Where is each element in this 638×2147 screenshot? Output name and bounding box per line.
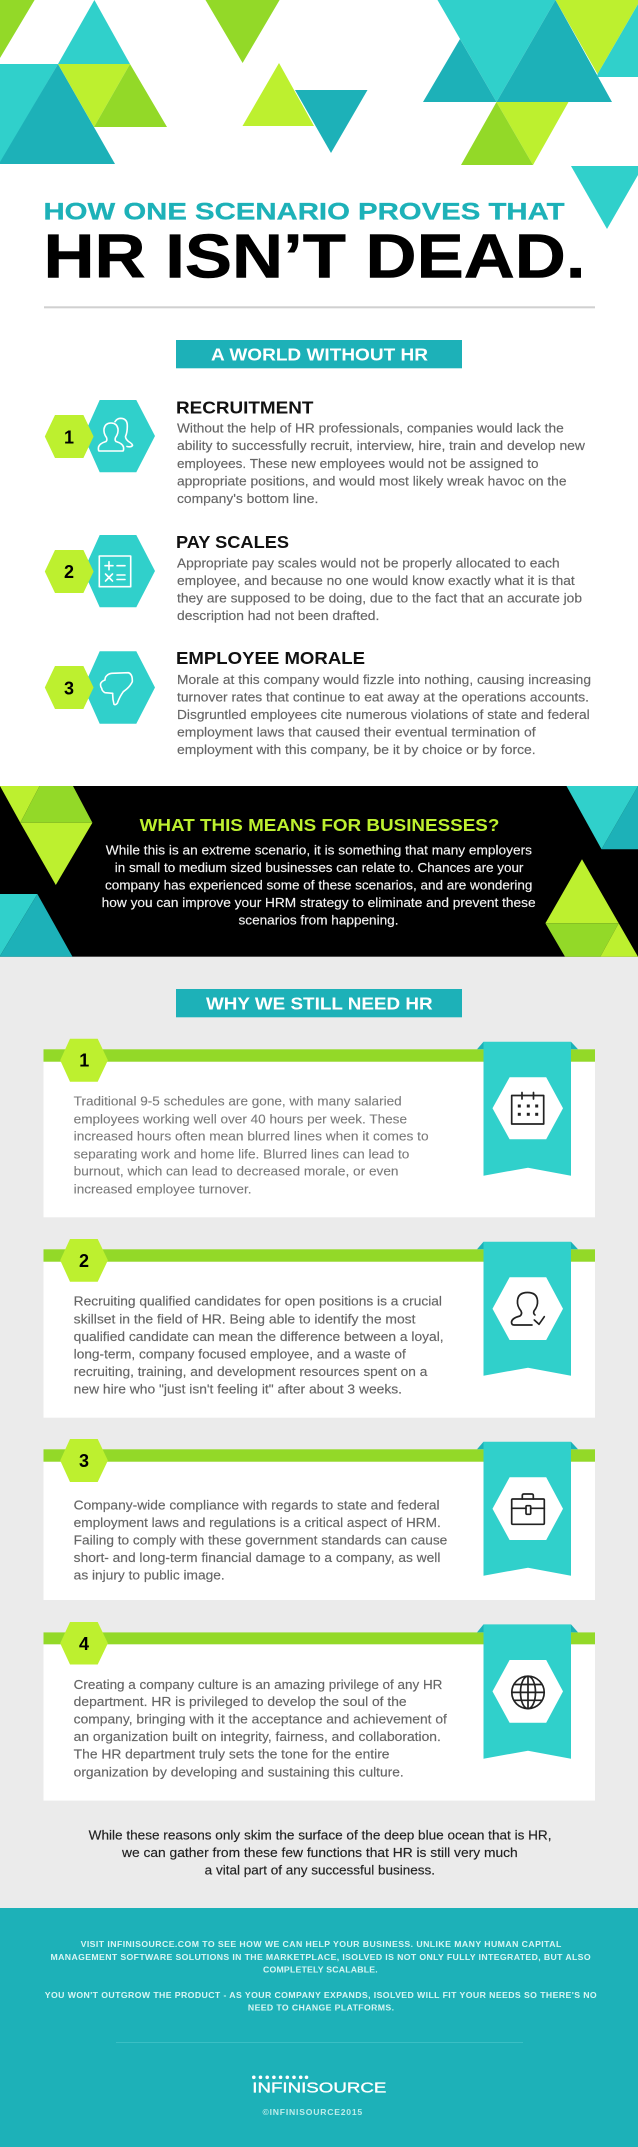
body text: department. HR is privileged to develop the soul of the xyxy=(74,1695,407,1709)
body text: Morale at this company would fizzle into nothing, causing increasing xyxy=(177,673,591,687)
body text xyxy=(74,1678,447,1779)
card 3 xyxy=(44,1439,595,1600)
heading: PAY SCALES xyxy=(176,532,289,552)
icon: calculator in hexagon: 2 xyxy=(64,562,74,582)
body text: Failing to comply with these government standards can cause xyxy=(74,1533,447,1547)
decorative triangles: band bottom left xyxy=(0,894,72,957)
body text: as injury to public image. xyxy=(74,1568,225,1582)
heading: WHAT THIS MEANS FOR BUSINESSES? xyxy=(140,815,499,835)
logo: infinisource: INFINISOURCE xyxy=(252,2081,386,2097)
icon: thumbs down in hexagon xyxy=(45,651,155,724)
body text: skillset in the field of HR. Being able to identify the most xyxy=(74,1312,416,1326)
body text: employment with this company, be it by choice or by force. xyxy=(177,743,536,757)
body text: While this is an extreme scenario, it is something that many employers xyxy=(106,843,532,857)
number hexagon xyxy=(60,1622,108,1664)
icon: people in hexagon xyxy=(45,400,155,472)
number hexagon: 4 xyxy=(79,1634,89,1654)
body text: how you can improve your HRM strategy to eliminate and prevent these xyxy=(102,896,536,910)
body text: employees working well over 40 hours per week. These xyxy=(74,1112,407,1126)
body text: separating work and home life. Blurred lines can lead to xyxy=(74,1147,409,1161)
closing statement: a vital part of any successful business. xyxy=(205,1863,435,1877)
body text: scenarios from happening. xyxy=(238,914,398,928)
body text: increased hours often mean blurred lines when it comes to xyxy=(74,1130,429,1144)
copyright: ©INFINISOURCE2015 xyxy=(262,2107,362,2117)
body text xyxy=(74,1295,444,1397)
footer text: COMPLETELY SCALABLE. xyxy=(263,1965,378,1975)
body text: Traditional 9-5 schedules are gone, with many salaried xyxy=(74,1095,402,1109)
icon: calculator in hexagon xyxy=(45,535,155,607)
footer text: YOU WON'T OUTGROW THE PRODUCT - AS YOUR COMPANY EXPANDS, ISOLVED WILL FIT YOUR NEEDS SO THERE'S NO xyxy=(45,1990,597,2000)
number hexagon: 1 xyxy=(79,1051,89,1071)
body text: turnover rates that continue to eat away at the operations accounts. xyxy=(177,690,589,704)
body text: qualified candidate can mean the difference between a loyal, xyxy=(74,1330,444,1344)
body text: organization by developing and sustaining this culture. xyxy=(74,1765,404,1779)
body text: Recruiting qualified candidates for open positions is a crucial xyxy=(74,1295,442,1309)
ribbon with calendar icon xyxy=(477,1042,578,1176)
body text: employee, and because no one would know exactly what it is that xyxy=(177,574,575,588)
body text: Creating a company culture is an amazing privilege of any HR xyxy=(74,1678,442,1692)
body text: an organization built on integrity, fairness, and collaboration. xyxy=(74,1730,441,1744)
body text: appropriate positions, and would most likely wreak havoc on the xyxy=(177,474,566,488)
heading: EMPLOYEE MORALE xyxy=(176,648,365,668)
body text: employment laws that caused their eventual termination of xyxy=(177,726,536,740)
footer text: MANAGEMENT SOFTWARE SOLUTIONS IN THE MARKETPLACE, ISOLVED IS NOT ONLY FULLY INTEGRATED, BUT ALSO xyxy=(50,1952,591,1962)
body text xyxy=(177,673,591,757)
closing statement: While these reasons only skim the surface of the deep blue ocean that is HR, xyxy=(89,1828,551,1842)
body text: burnout, which can lead to decreased morale, or even xyxy=(74,1165,398,1179)
number hexagon xyxy=(60,1239,108,1282)
body text xyxy=(74,1095,429,1196)
body text: The HR department truly sets the tone for the entire xyxy=(74,1748,389,1762)
body text: Company-wide compliance with regards to state and federal xyxy=(74,1498,440,1512)
title: HOW ONE SCENARIO PROVES THAT xyxy=(44,198,565,226)
ribbon with person check icon xyxy=(477,1242,578,1376)
footer text: NEED TO CHANGE PLATFORMS. xyxy=(248,2003,394,2013)
number hexagon: 3 xyxy=(79,1451,89,1471)
ribbon with briefcase icon xyxy=(477,1442,578,1576)
decorative triangles: top centre cluster xyxy=(206,0,368,153)
body text: long-term, company focused employee, and a waste of xyxy=(74,1347,406,1361)
number hexagon: 2 xyxy=(79,1251,89,1271)
body text: Disgruntled employees cite numerous violations of state and federal xyxy=(177,708,590,722)
decorative triangles: top left cluster xyxy=(0,0,167,164)
decorative triangles: band top left xyxy=(0,786,92,885)
section heading: a world without HR xyxy=(176,340,462,368)
body text: in small to medium sized businesses can relate to. Chances are your xyxy=(115,861,523,875)
logo: infinisource xyxy=(252,2076,386,2097)
body text xyxy=(177,422,586,506)
ribbon with globe icon xyxy=(477,1624,578,1759)
footer text xyxy=(45,1939,597,2013)
section heading: a world without HR: A WORLD WITHOUT HR xyxy=(211,345,428,365)
title xyxy=(44,198,586,291)
body text: increased employee turnover. xyxy=(74,1182,252,1196)
body text: short- and long-term financial damage to a company, as well xyxy=(74,1551,440,1565)
body text xyxy=(177,557,582,623)
item: recruitment xyxy=(45,397,586,506)
icon: people in hexagon: 1 xyxy=(64,428,74,448)
body text: recruiting, training, and development resources spent on a xyxy=(74,1365,427,1379)
body text xyxy=(102,843,536,928)
section heading: why we still need HR xyxy=(176,989,462,1017)
number hexagon xyxy=(60,1439,108,1482)
closing statement: we can gather from these few functions that HR is still very much xyxy=(121,1846,518,1860)
card 1 xyxy=(44,1039,595,1217)
icon: thumbs down in hexagon: 3 xyxy=(64,678,74,698)
decorative triangles: band bottom right xyxy=(545,859,638,957)
body text: they are supposed to be doing, due to the fact that an accurate job xyxy=(177,592,582,606)
decorative triangles: band top right xyxy=(566,786,638,849)
body text: company has experienced some of these scenarios, and are wondering xyxy=(105,878,532,892)
section heading: why we still need HR: WHY WE STILL NEED HR xyxy=(206,993,433,1013)
footer text: VISIT INFINISOURCE.COM TO SEE HOW WE CAN HELP YOUR BUSINESS. UNLIKE MANY HUMAN CAPITAL xyxy=(81,1939,562,1949)
title: HR ISN’T DEAD. xyxy=(44,221,586,291)
body text: employees. These new employees would not be assigned to xyxy=(177,457,538,471)
panel: what this means for businesses xyxy=(0,786,638,957)
body text: employment laws and regulations is a critical aspect of HRM. xyxy=(74,1516,441,1530)
body text: Appropriate pay scales would not be properly allocated to each xyxy=(177,557,560,571)
item: pay scales xyxy=(45,532,582,623)
body text: company, bringing with it the acceptance and achievement of xyxy=(74,1713,447,1727)
heading: RECRUITMENT xyxy=(176,397,314,417)
body text: description had not been drafted. xyxy=(177,609,379,623)
body text: Without the help of HR professionals, companies would lack the xyxy=(177,422,564,436)
closing statement xyxy=(89,1828,551,1877)
decorative triangles: top right cluster xyxy=(423,0,638,229)
item: employee morale xyxy=(45,648,591,757)
body text xyxy=(74,1498,447,1582)
body text: new hire who "just isn't feeling it" after about 3 weeks. xyxy=(74,1383,402,1397)
body text: ability to successfully recruit, interview, hire, train and develop new xyxy=(177,439,586,453)
footer panel xyxy=(0,1908,638,2147)
card 4 xyxy=(44,1622,595,1801)
number hexagon xyxy=(60,1039,108,1082)
card 2 xyxy=(44,1239,595,1418)
body text: company's bottom line. xyxy=(177,492,318,506)
